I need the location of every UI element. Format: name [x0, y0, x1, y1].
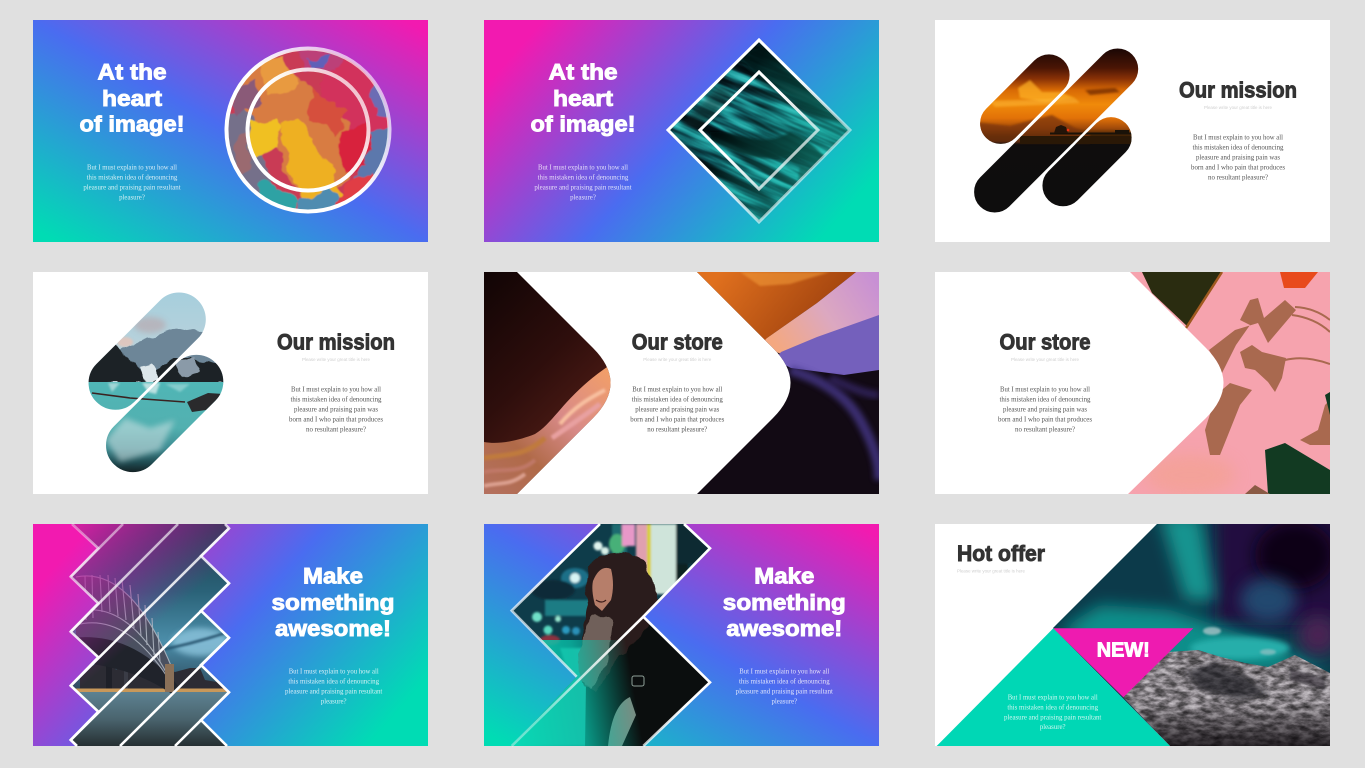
slide 3 heading: Our mission	[1179, 77, 1297, 102]
slide 4 body text	[289, 387, 383, 434]
slide 5: our store, canyon arrow	[484, 272, 880, 494]
photo: canyon rock, right	[685, 272, 880, 494]
slide 4 body text: no resultant pleasure?	[306, 427, 366, 434]
slide 6 body text: born and I who pain that produces	[998, 417, 1092, 424]
slide 2: at the heart of image, diamond	[484, 20, 879, 242]
slide 4: our mission, lake pills	[33, 272, 428, 494]
slide 5 body text	[630, 387, 725, 434]
NEW label: NEW!	[1097, 640, 1150, 662]
slide 8 title	[723, 563, 846, 641]
slide 9: hot offer	[935, 524, 1330, 746]
photo: canyon rock, left	[484, 272, 610, 494]
photo: sunset pier in three pills	[970, 45, 1140, 215]
slide 9 body text	[1004, 694, 1101, 731]
slide 3: our mission, sunset pills	[935, 20, 1330, 242]
slide 4 body text: this mistaken idea of denouncing	[290, 397, 382, 404]
slide 3 body text: But I must explain to you how all	[1193, 134, 1283, 141]
slide 2 title: of image!	[530, 112, 636, 137]
photo: harbour bridge in zigzag stripes	[70, 524, 229, 746]
slide 4 heading: Our mission	[277, 329, 395, 354]
slide 6 body text: But I must explain to you how all	[1000, 387, 1090, 394]
slide 5 body text: pleasure and praising pain was	[635, 407, 720, 414]
slide 1 title: heart	[102, 86, 163, 111]
photo: marbled paint in circle	[228, 49, 389, 210]
slide 7 title: awesome!	[275, 616, 391, 641]
slide 4 subtitle: Please write your great title is here	[302, 357, 370, 362]
slide 3 white background	[935, 20, 1330, 242]
slide 5 heading: Our store	[632, 329, 723, 354]
slide 2 title: At the	[548, 60, 618, 84]
slide 1 body text: this mistaken idea of denouncing	[87, 175, 178, 182]
photo: mountain lake in two pills	[88, 292, 224, 472]
slide 6 heading: Our store	[1000, 329, 1090, 354]
teal triangle	[937, 628, 1170, 746]
slide 1 title: At the	[98, 60, 166, 84]
slide 2 body text: this mistaken idea of denouncing	[538, 175, 629, 182]
slide 9 subtitle: Please write your great title is here	[957, 569, 1025, 574]
diamond frames	[668, 40, 850, 222]
slide 7 body text: pleasure?	[321, 698, 347, 706]
slide 8 body text: pleasure?	[771, 698, 797, 706]
photo: leaf shadows on pink wall	[1125, 272, 1331, 495]
slide 8: make something awesome, portrait	[484, 524, 879, 750]
slide 4 body text: pleasure and praising pain was	[294, 407, 378, 414]
slide 5 body text: But I must explain to you how all	[632, 387, 722, 394]
slide 7 title: something	[272, 590, 394, 615]
slide 6 subtitle: Please write your great title is here	[1011, 357, 1079, 362]
slide 2 body text: pleasure?	[570, 194, 596, 202]
slide 6 white background	[935, 272, 1330, 494]
slide 4 white background	[33, 272, 428, 494]
slide 2 body text: But I must explain to you how all	[538, 165, 628, 172]
chevron frame	[512, 524, 710, 746]
slide 3 body text: born and I who pain that produces	[1191, 164, 1285, 171]
slide 5 subtitle: Please write your great title is here	[643, 357, 712, 362]
photo: woman at night in chevron	[500, 524, 715, 750]
slide 5 body text: born and I who pain that produces	[630, 417, 725, 424]
slide 8 body text: this mistaken idea of denouncing	[739, 679, 830, 686]
slide 7 body text: this mistaken idea of denouncing	[288, 679, 380, 686]
slide 9 white background	[935, 524, 1330, 746]
slide 6 body text: this mistaken idea of denouncing	[1000, 397, 1091, 404]
slide 8 title: awesome!	[726, 616, 842, 641]
slide 8 body text	[736, 669, 833, 706]
slide 6 body text: no resultant pleasure?	[1015, 427, 1075, 434]
slide 3 body text: no resultant pleasure?	[1208, 174, 1268, 181]
slide 1 body text: pleasure?	[119, 194, 145, 202]
slide 1: at the heart of image, circle	[33, 20, 430, 242]
slide 1 title: of image!	[80, 112, 184, 137]
photo: aurora over mountain	[1053, 524, 1330, 746]
slide 8 title: something	[723, 590, 846, 615]
slide 3 subtitle: Please write your great title is here	[1204, 105, 1272, 110]
slide 7 gradient background	[33, 524, 428, 746]
slide 9 heading: Hot offer	[957, 541, 1045, 566]
slide 3 body text: pleasure and praising pain was	[1196, 154, 1280, 161]
slide 1 body text: pleasure and praising pain resultant	[83, 185, 181, 192]
circle rings	[226, 48, 390, 212]
photo: teal marble in diamond	[670, 42, 850, 222]
slide 1 title	[80, 60, 184, 137]
slide 7 body text	[285, 669, 382, 706]
slide 2 title: heart	[553, 86, 614, 111]
slide 1 gradient background	[33, 20, 428, 242]
slide 9 body text: pleasure and praising pain resultant	[1004, 714, 1101, 721]
slide 2 title	[530, 60, 636, 137]
slide 7 body text: pleasure and praising pain resultant	[285, 689, 382, 696]
slide 1 body text: But I must explain to you how all	[87, 165, 177, 172]
slide 2 body text	[534, 165, 632, 202]
slide 7 title: Make	[303, 563, 363, 588]
slide 4 body text: born and I who pain that produces	[289, 417, 383, 424]
slide 6: our store, pink leaves	[935, 272, 1331, 495]
slide 5 white background	[484, 272, 879, 494]
slide 2 body text: pleasure and praising pain resultant	[534, 185, 632, 192]
slide 9 body text: pleasure?	[1040, 724, 1066, 731]
zigzag stripe frame	[71, 524, 229, 746]
slide 7 body text: But I must explain to you how all	[289, 669, 379, 676]
slide 8 body text: pleasure and praising pain resultant	[736, 689, 833, 696]
slide 3 body text	[1191, 134, 1285, 181]
slide 6 body text	[998, 387, 1092, 434]
slide 5 body text: no resultant pleasure?	[647, 427, 707, 434]
slide 1 body text	[83, 165, 181, 202]
pink triangle badge	[1053, 628, 1193, 697]
slide 7: make something awesome, bridge stripes	[33, 510, 428, 746]
slide 8 body text: But I must explain to you how all	[739, 669, 829, 676]
slide 9 body text: But I must explain to you how all	[1008, 694, 1098, 701]
slide 9 body text: this mistaken idea of denouncing	[1007, 704, 1099, 711]
slide 6 body text: pleasure and praising pain was	[1003, 407, 1087, 414]
slide 4 body text: But I must explain to you how all	[291, 387, 381, 394]
slide 7 title	[272, 563, 394, 641]
slide 5 body text: this mistaken idea of denouncing	[632, 397, 723, 404]
slide 8 title: Make	[754, 563, 814, 588]
slide 2 gradient background	[484, 20, 879, 242]
slide 3 body text: this mistaken idea of denouncing	[1192, 144, 1284, 151]
slide 8 gradient background	[484, 524, 879, 746]
